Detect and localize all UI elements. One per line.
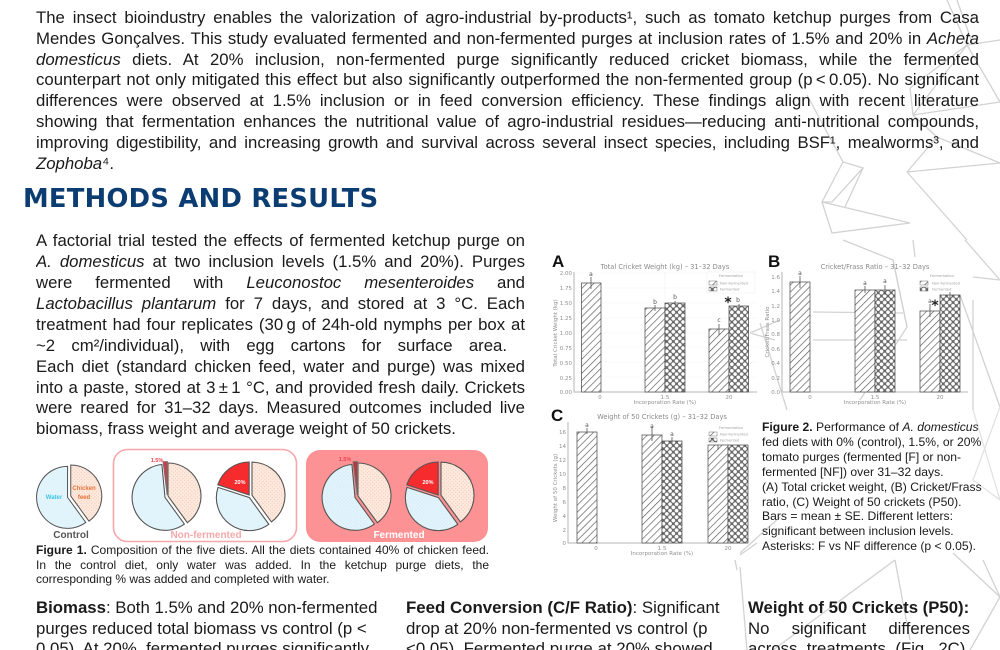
methods paragraph xyxy=(36,231,525,438)
text block: biomass: Biomass: Both 1.5% and 20% non-fermented xyxy=(36,598,377,617)
panel: fermented xyxy=(306,450,488,542)
intro paragraph: domesticus diets. At 20% inclusion, non-fermented purge significantly reduced cricket biomass, while the fermented xyxy=(36,50,979,69)
methods paragraph: Lactobacillus plantarum for 7 days, and stored at 3 °C. Each xyxy=(36,294,525,313)
methods paragraph: treatment had four replicates (30 g of 24h-old nymphs per box at xyxy=(36,315,525,334)
significance letters A: b xyxy=(653,299,657,306)
figure 2 caption: significant between inclusion levels. xyxy=(762,524,954,538)
label: chicken feed: Chicken xyxy=(72,486,96,492)
label: 20% non-fermented: 20% xyxy=(234,480,246,486)
bars B xyxy=(790,282,960,392)
y ticks A: 1.25 xyxy=(560,316,572,322)
intro paragraph: Zophoba⁴. xyxy=(36,154,114,173)
figure 1 caption: corresponding % was added and completed with water. xyxy=(36,572,330,586)
significance letters B: a xyxy=(798,270,802,277)
significance letters A: a xyxy=(589,271,593,278)
significance letters A: b xyxy=(673,294,677,301)
legend A: Fermentation xyxy=(719,274,743,278)
legend C: Fermented xyxy=(720,438,739,442)
intro paragraph: counterpart not only mitigated this effect but also significantly outperformed the non-fermented group (p < 0.05). No significant xyxy=(36,70,979,89)
intro paragraph xyxy=(36,8,979,173)
y ticks A xyxy=(560,271,572,396)
significance letters A xyxy=(589,271,740,324)
significance letters C: a xyxy=(585,422,589,429)
label: control: Control xyxy=(53,530,89,541)
axis titles C: 20 xyxy=(724,546,732,552)
panel letter C: C xyxy=(551,406,563,425)
figure 2 caption: ratio, (C) Weight of 50 crickets (P50). xyxy=(762,495,962,509)
y ticks C: 0 xyxy=(562,541,566,547)
text block: weight of 50 crickets: No significant differences xyxy=(748,619,970,638)
methods paragraph: into a paste, stored at 3 ± 1 °C, and provided fresh daily. Crickets xyxy=(36,378,525,397)
y ticks C: 4 xyxy=(562,514,566,520)
axis titles C: Weight of 50 Crickets (g) xyxy=(553,454,559,522)
methods paragraph: A factorial trial tested the effects of fermented ketchup purge on xyxy=(36,231,525,250)
axis titles A: Total Cricket Weight (kg) xyxy=(553,299,559,368)
legend A: Non-Fermented xyxy=(720,282,748,286)
figure 2 caption: (A) Total cricket weight, (B) Cricket/Frass xyxy=(762,480,982,494)
asterisk A: * xyxy=(724,295,732,311)
methods paragraph: A. domesticus at two inclusion levels (1.5% and 20%). Purges xyxy=(36,252,525,271)
y ticks A: 2.00 xyxy=(560,271,572,277)
methods paragraph: biomass, frass weight and average weight of 50 crickets. xyxy=(36,419,456,438)
legend C: Non-Fermented xyxy=(720,432,748,436)
pie: fermented 20% xyxy=(405,462,474,531)
y ticks A: 0.25 xyxy=(560,376,572,382)
text block: biomass xyxy=(36,598,377,650)
text block: weight of 50 crickets: Weight of 50 Crickets (P50): xyxy=(748,598,969,617)
methods paragraph: ~2 cm²/individual), with egg cartons for surface area. xyxy=(36,336,507,355)
text block: feed conversion xyxy=(406,598,720,650)
bars A xyxy=(582,283,748,392)
y ticks A: 1.75 xyxy=(560,286,572,292)
y ticks C xyxy=(559,430,566,547)
y ticks A: 1.00 xyxy=(560,331,572,337)
axis titles A: Incorporation Rate (%) xyxy=(634,400,696,406)
label: 20% fermented: 20% xyxy=(422,480,434,486)
axis titles C: 0 xyxy=(594,546,598,552)
y ticks C: 8 xyxy=(562,486,566,492)
axis titles C xyxy=(553,454,732,557)
axis titles B: 1.5 xyxy=(871,395,880,401)
y ticks B: 1.2 xyxy=(771,304,780,310)
legend A: Fermented xyxy=(720,288,739,292)
figure 2 caption: fermented [NF]) over 31–32 days. xyxy=(762,465,944,479)
figure 2 caption: tomato purges (fermented [F] or non- xyxy=(762,450,961,464)
intro paragraph: showing that fermentation enhances the nutritional value of agro-industrial residues—reducing anti-nutritional compounds, xyxy=(36,112,979,131)
axis titles B: 20 xyxy=(936,395,944,401)
axis titles B xyxy=(765,306,944,406)
figure 2 caption: Bars = mean ± SE. Different letters: xyxy=(762,509,953,523)
y ticks B: 0.0 xyxy=(771,390,780,396)
y ticks C: 2 xyxy=(562,528,566,534)
axis titles A: 1.5 xyxy=(661,395,670,401)
axis titles B: 0 xyxy=(808,395,812,401)
label: water: Water xyxy=(46,495,63,501)
legend B xyxy=(920,274,960,292)
y ticks B: 0.4 xyxy=(771,361,780,367)
methods paragraph: were reared for 31–32 days. Measured outcomes included live xyxy=(36,398,525,417)
axis titles A: 0 xyxy=(598,395,602,401)
y ticks B: 0.8 xyxy=(771,332,780,338)
significance letters C: a xyxy=(650,423,654,430)
y ticks C: 14 xyxy=(559,444,566,450)
y ticks B: 0.2 xyxy=(771,376,780,382)
intro paragraph: The insect bioindustry enables the valorization of agro-industrial by-products¹, such as tomato ketchup purges from Casa xyxy=(36,8,979,27)
significance letters B: a xyxy=(863,280,867,287)
intro paragraph: differences were observed at 1.5% inclusion or in feed conversion efficiency. These findings align with recent literature xyxy=(36,91,979,110)
significance letters C xyxy=(585,422,674,438)
pie: non-fermented 1.5% xyxy=(132,462,201,530)
chart title C: Weight of 50 Crickets (g) – 31–32 Days xyxy=(597,413,727,421)
significance letters B: a xyxy=(883,278,887,285)
text block: biomass: purges reduced total biomass vs control (p < xyxy=(36,619,367,638)
axis titles A: 20 xyxy=(726,395,733,401)
legend B: Fermentation xyxy=(930,274,954,278)
text block: feed conversion: drop at 20% non-fermented vs control (p xyxy=(406,619,707,638)
label: 1.5% non-fermented: 1.5% xyxy=(151,458,163,464)
chart title B: Cricket/Frass Ratio – 31–32 Days xyxy=(821,263,930,271)
significance letters A: b xyxy=(736,297,740,304)
pie: control xyxy=(37,465,102,528)
figure 2 caption xyxy=(762,420,982,553)
text block: feed conversion: Feed Conversion (C/F Ratio): Significant xyxy=(406,598,720,617)
panel letter A: A xyxy=(552,252,564,271)
figure 1 caption xyxy=(36,543,489,586)
panel: non-fermented xyxy=(114,450,296,542)
significance letters C: a xyxy=(670,431,674,438)
figure 1 caption: In the control diet, only water was added. In the ketchup purge diets, the xyxy=(36,558,489,572)
significance letters B xyxy=(798,270,932,305)
heading: methods and results: METHODS AND RESULTS xyxy=(23,184,378,214)
figure 1 caption: Figure 1. Composition of the five diets. All the diets contained 40% of chicken feed. xyxy=(36,543,489,557)
significance letters B: a xyxy=(928,298,932,305)
label: chicken feed: feed xyxy=(78,495,90,501)
legend C xyxy=(709,426,748,442)
y ticks C: 10 xyxy=(559,472,566,478)
axis titles B: Incorporation Rate (%) xyxy=(844,400,906,406)
figure 2 caption: Asterisks: F vs NF difference (p < 0.05). xyxy=(762,539,976,553)
axis titles B: Cricket/Frass Ratio xyxy=(765,306,771,358)
asterisk B: * xyxy=(931,298,939,314)
intro paragraph: improving digestibility, and increasing growth and survival across several insect species, including BSF¹, mealworms³, and xyxy=(36,133,979,152)
axis titles C: Incorporation Rate (%) xyxy=(631,551,693,557)
y ticks C: 16 xyxy=(559,430,566,436)
y ticks B: 0.6 xyxy=(771,347,780,353)
y ticks B xyxy=(771,275,780,396)
figure 2 caption: Figure 2. Performance of A. domesticus xyxy=(762,420,979,434)
axis titles C: 1.5 xyxy=(658,546,667,552)
chart title A: Total Cricket Weight (kg) – 31–32 Days xyxy=(600,263,730,271)
y ticks B: 1.0 xyxy=(771,318,780,324)
label: non-fermented: Non-fermented xyxy=(170,530,242,541)
y ticks C: 6 xyxy=(562,500,566,506)
axis titles A xyxy=(553,299,733,406)
legend C: Fermentation xyxy=(719,426,743,430)
y ticks B: 1.6 xyxy=(771,275,780,281)
y ticks A: 0.00 xyxy=(560,390,572,396)
y ticks A: 0.75 xyxy=(560,346,572,352)
pie: non-fermented 20% xyxy=(216,462,285,531)
figure 2 caption: fed diets with 0% (control), 1.5%, or 20% xyxy=(762,435,981,449)
y ticks A: 0.50 xyxy=(560,361,572,367)
bars C xyxy=(577,432,748,543)
intro paragraph: Mendes Gonçalves. This study evaluated fermented and non-fermented purges at inclusion rates of 1.5% and 20% in Acheta xyxy=(36,29,979,48)
legend B: Non-Fermented xyxy=(932,282,960,286)
panel letter B: B xyxy=(768,252,780,271)
y ticks A: 1.50 xyxy=(560,301,572,307)
methods paragraph: were fermented with Leuconostoc mesenteroides and xyxy=(36,273,525,292)
significance letters A: c xyxy=(717,317,721,324)
label: 1.5% fermented: 1.5% xyxy=(339,457,351,463)
y ticks B: 1.4 xyxy=(771,289,780,295)
methods paragraph: Each diet (standard chicken feed, water and purge) was mixed xyxy=(36,357,525,376)
text block: weight of 50 crickets xyxy=(748,598,970,650)
legend A xyxy=(707,272,755,293)
pie: fermented 1.5% xyxy=(322,462,391,530)
label: fermented: Fermented xyxy=(373,530,425,541)
y ticks C: 12 xyxy=(559,458,566,464)
legend B: Fermented xyxy=(932,288,951,292)
